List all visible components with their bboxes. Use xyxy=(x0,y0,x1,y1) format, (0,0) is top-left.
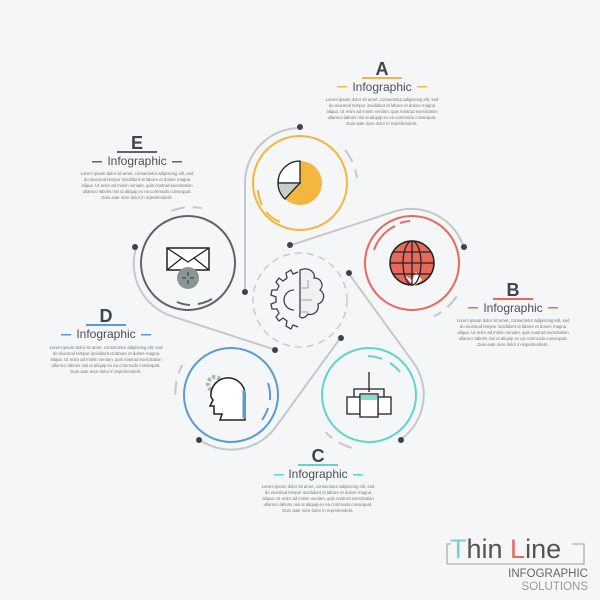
circle C: hierarchy xyxy=(322,348,416,442)
text block E: E xyxy=(131,133,143,153)
text block D: Infographic xyxy=(76,327,136,341)
text block A: Infographic xyxy=(352,80,412,94)
text block C xyxy=(262,446,375,513)
text block D: do eiusmod tempor incididunt ut labore et dolore magna xyxy=(53,351,160,356)
text block E: Infographic xyxy=(107,154,167,168)
text block E: ullamco laboris nisi ut aliquip ex ea commodo consequat. xyxy=(83,189,191,194)
logo: Thin Line xyxy=(447,534,588,593)
text block D xyxy=(50,306,163,374)
text block A: Lorem ipsum dolor sit amet, consectetur adipiscing elit, sed xyxy=(326,97,439,102)
text block B: do eiusmod tempor incididunt ut labore et dolore magna xyxy=(460,324,567,329)
text block E xyxy=(81,133,194,200)
text block A: A xyxy=(376,59,388,79)
text block B xyxy=(457,280,570,347)
text block D: aliqua. Ut enim ad minim veniam, quis nostrud exercitation xyxy=(50,357,162,362)
text block A: Duis aute irure dolor in reprehenderit. xyxy=(346,121,418,126)
text block B: aliqua. Ut enim ad minim veniam, quis nostrud exercitation xyxy=(457,330,569,335)
text block E: Duis aute irure dolor in reprehenderit. xyxy=(101,195,173,200)
text block A: ullamco laboris nisi ut aliquip ex ea commodo consequat. xyxy=(328,115,436,120)
text block C: aliqua. Ut enim ad minim veniam, quis nostrud exercitation xyxy=(262,496,374,501)
text block B: Infographic xyxy=(483,301,543,315)
text block E: do eiusmod tempor incididunt ut labore et dolore magna xyxy=(84,177,191,182)
text block D: Duis aute irure dolor in reprehenderit. xyxy=(70,369,142,374)
text block A xyxy=(326,59,439,126)
circle D: head xyxy=(184,348,278,442)
text block E: aliqua. Ut enim ad minim veniam, quis nostrud exercitation xyxy=(81,183,193,188)
text block B: Duis aute irure dolor in reprehenderit. xyxy=(477,342,549,347)
text block B: B xyxy=(506,280,520,300)
text block C: C xyxy=(312,446,324,466)
text block B: ullamco laboris nisi ut aliquip ex ea commodo consequat. xyxy=(459,336,567,341)
text block D: ullamco laboris nisi ut aliquip ex ea commodo consequat. xyxy=(52,363,160,368)
logo: Thin Line: Thin Line xyxy=(450,534,561,564)
center circle: gear-brain xyxy=(253,253,347,347)
text block C: ullamco laboris nisi ut aliquip ex ea commodo consequat. xyxy=(264,502,372,507)
text block A: do eiusmod tempor incididunt ut labore et dolore magna xyxy=(329,103,436,108)
text block C: Infographic xyxy=(288,467,348,481)
text block D: D xyxy=(100,306,112,326)
text block A: aliqua. Ut enim ad minim veniam, quis nostrud exercitation xyxy=(326,109,438,114)
text block D: Lorem ipsum dolor sit amet, consectetur adipiscing elit, sed xyxy=(50,345,163,350)
text block B: Lorem ipsum dolor sit amet, consectetur adipiscing elit, sed xyxy=(457,318,570,323)
circle A: pie chart xyxy=(253,136,347,230)
logo: Thin Line: SOLUTIONS xyxy=(522,581,588,593)
text block C: Duis aute irure dolor in reprehenderit. xyxy=(282,508,354,513)
circle B: globe xyxy=(365,216,459,310)
text block E: Lorem ipsum dolor sit amet, consectetur adipiscing elit, sed xyxy=(81,171,194,176)
logo: Thin Line: INFOGRAPHIC xyxy=(508,568,588,580)
text block C: do eiusmod tempor incididunt ut labore et dolore magna xyxy=(265,490,372,495)
text block C: Lorem ipsum dolor sit amet, consectetur adipiscing elit, sed xyxy=(262,484,375,489)
circle E: envelope xyxy=(141,216,235,310)
connectors xyxy=(119,124,481,473)
